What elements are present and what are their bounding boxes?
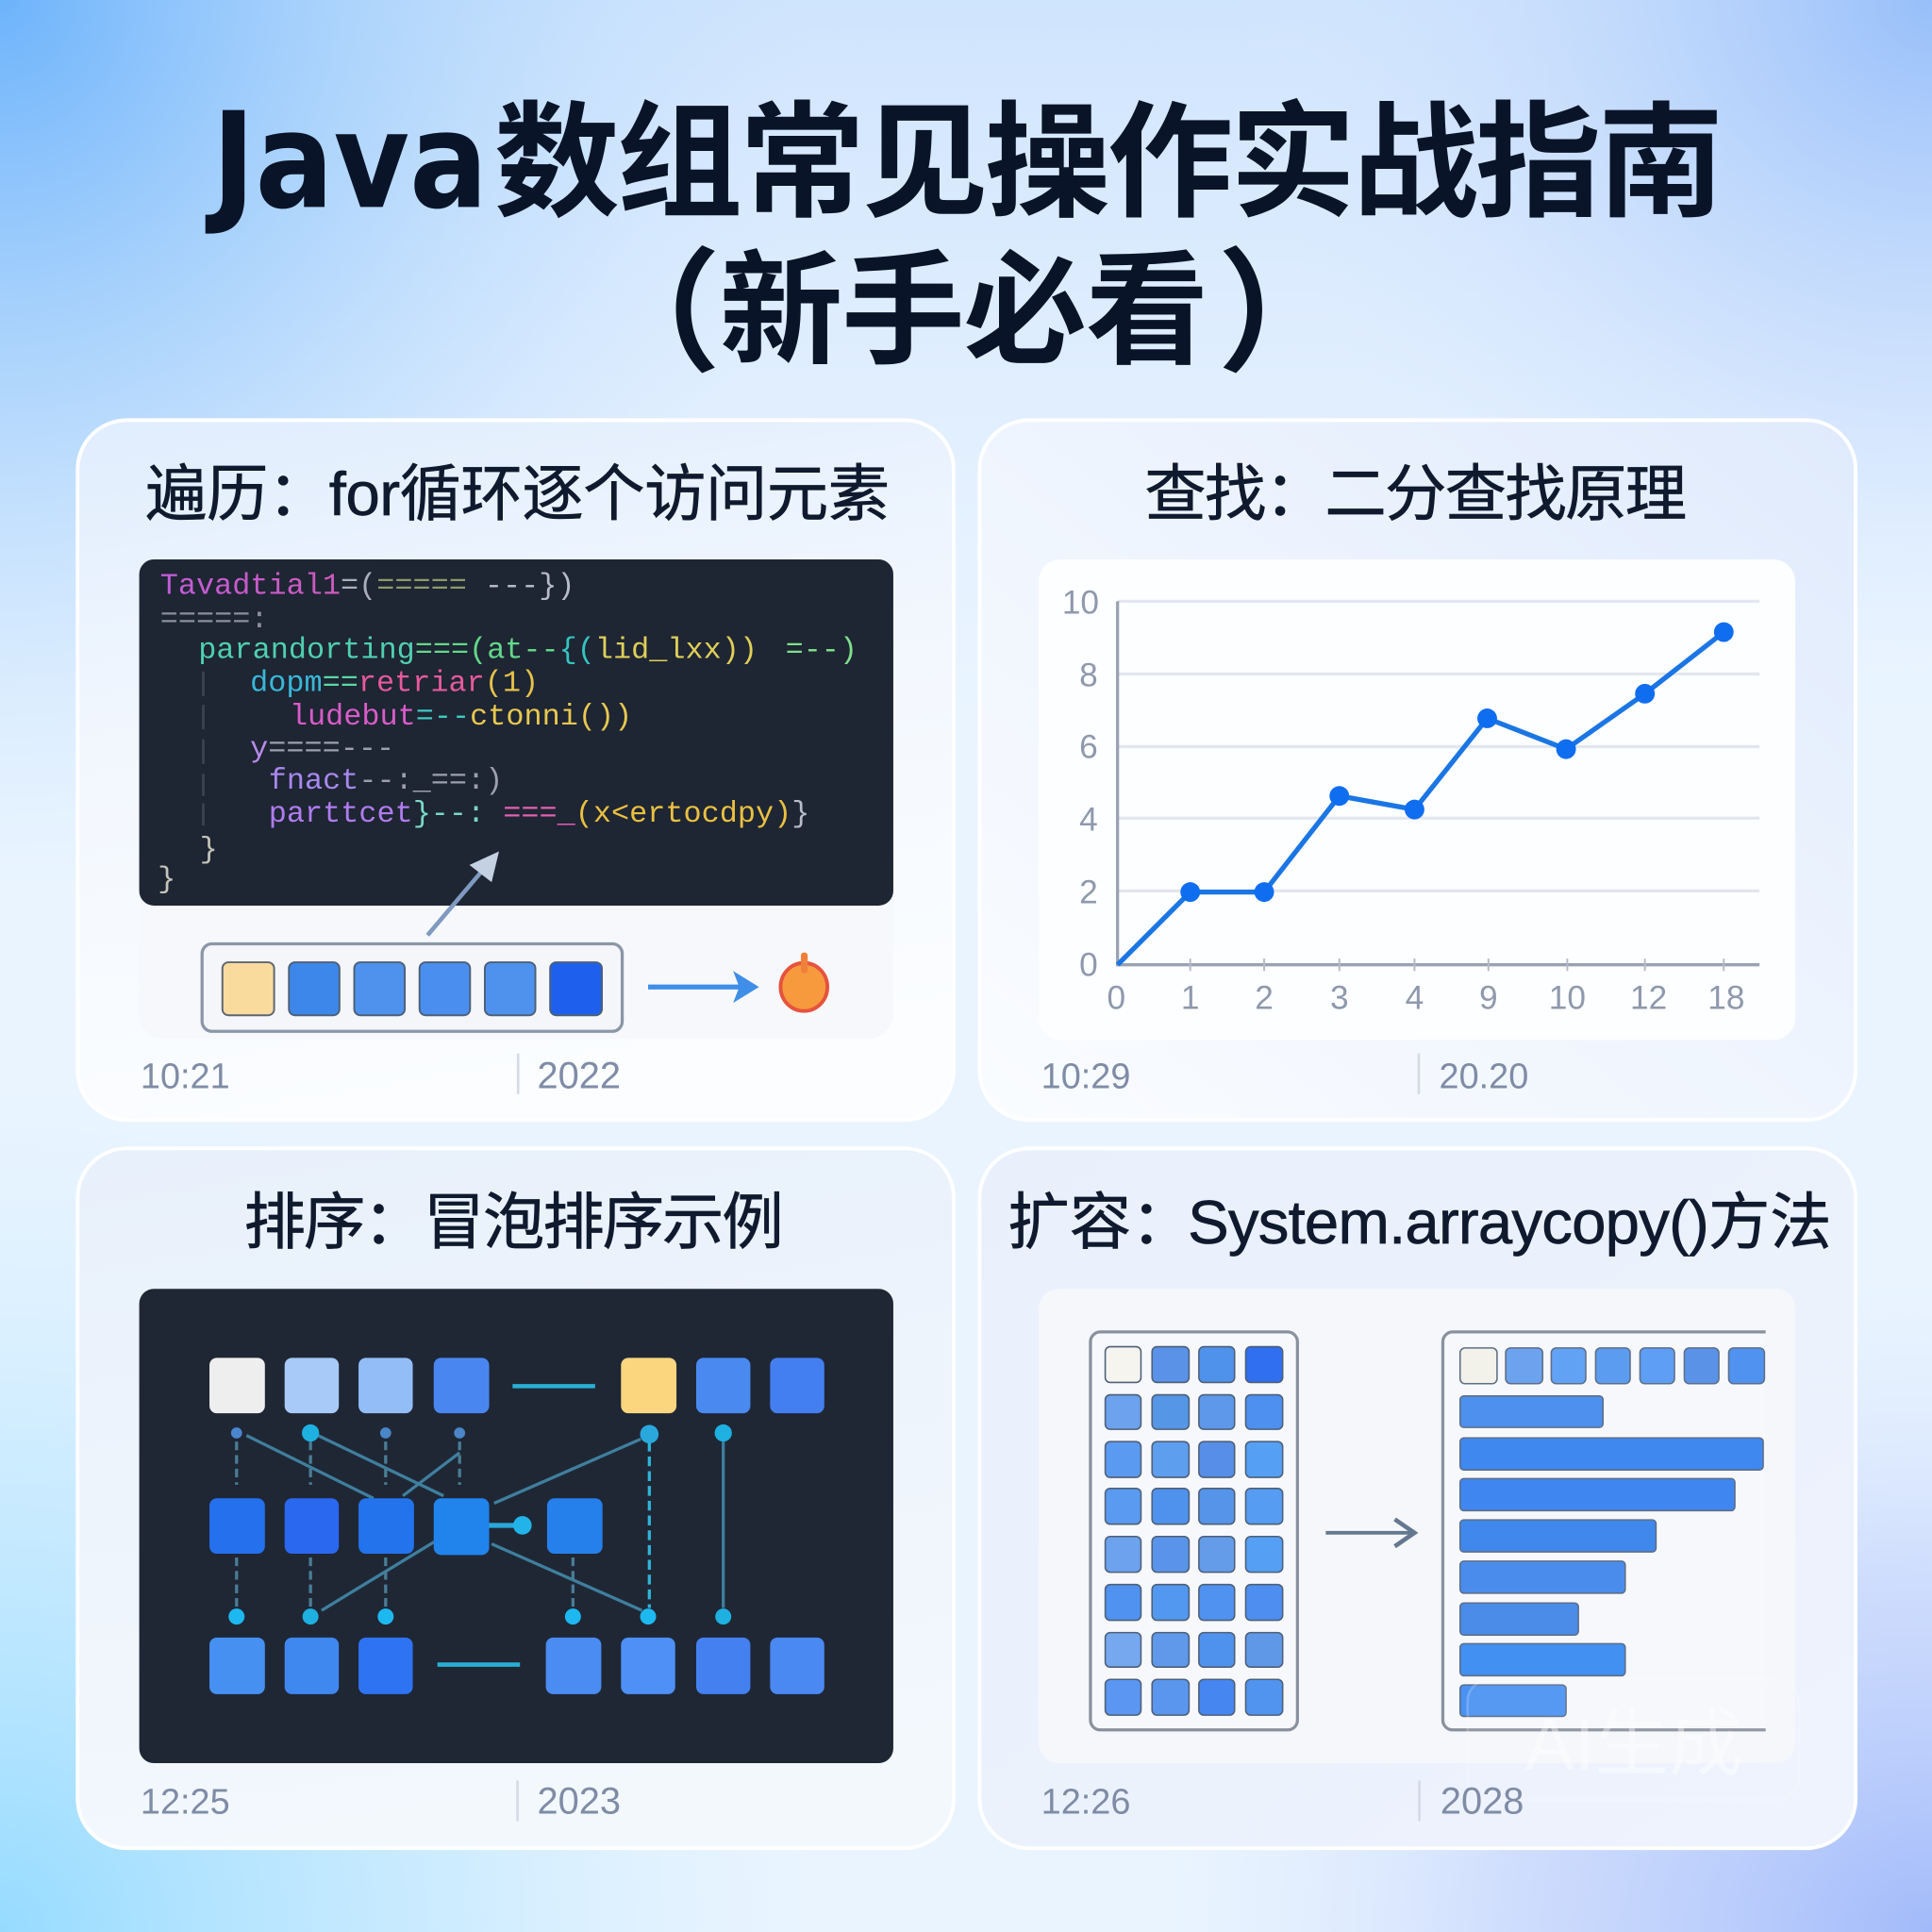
panel: search xyxy=(979,420,1856,1120)
footer: traversal xyxy=(141,1054,621,1096)
code editor block: } xyxy=(200,832,218,867)
watermark xyxy=(1468,1679,1799,1800)
code editor block: dopm==retriar(1) xyxy=(250,666,539,701)
title: （ xyxy=(588,205,721,398)
x axis labels: 3 xyxy=(1330,980,1349,1017)
footer: search: 20.20 xyxy=(1440,1057,1528,1096)
source array xyxy=(1091,1332,1297,1730)
panel: sort xyxy=(77,1148,954,1848)
footer: traversal: 2022 xyxy=(537,1055,621,1096)
y axis labels: 4 xyxy=(1079,801,1098,838)
y axis labels: 10 xyxy=(1062,584,1099,621)
squares row 3 xyxy=(209,1638,824,1694)
footer: sort: 12:25 xyxy=(141,1783,230,1823)
heading: traversal: 遍历：for循环逐个访问元素 xyxy=(145,459,890,528)
data line xyxy=(1118,632,1724,965)
squares row 2 xyxy=(209,1498,603,1555)
footer: expansion xyxy=(1041,1780,1524,1823)
y axis labels: 0 xyxy=(1079,946,1098,983)
code editor block: =====: xyxy=(160,602,269,637)
x axis labels: 18 xyxy=(1707,980,1744,1017)
code editor block: parandorting===(at--{(lid_lxx)) =--) xyxy=(198,632,858,667)
footer: sort: 2023 xyxy=(537,1781,621,1823)
watermark: AI生成 xyxy=(1525,1703,1742,1786)
x axis labels: 2 xyxy=(1255,980,1274,1017)
code editor block xyxy=(140,559,893,906)
arrow: copy xyxy=(1325,1519,1414,1546)
y axis labels xyxy=(1062,584,1099,983)
code editor block: Tavadtial1=(===== ---}) xyxy=(160,569,575,604)
destination array xyxy=(1442,1332,1766,1730)
arrow: to output xyxy=(648,971,759,1003)
x axis labels: 1 xyxy=(1181,980,1200,1017)
bubble sort diagram xyxy=(140,1289,893,1763)
array copy diagram xyxy=(1039,1289,1795,1763)
panel: expansion xyxy=(979,1148,1856,1848)
array row xyxy=(202,943,623,1031)
title: 新手必看 xyxy=(720,210,1208,390)
lower illustration area xyxy=(140,899,893,1039)
x axis labels: 4 xyxy=(1406,980,1424,1017)
icon: orange element xyxy=(780,953,827,1011)
code editor block: y====--- xyxy=(250,731,394,766)
x axis labels: 0 xyxy=(1108,980,1125,1017)
title: ） xyxy=(1217,205,1350,398)
footer: search: 10:29 xyxy=(1041,1057,1130,1096)
title: 数组常见操作实战指南 xyxy=(494,61,1724,243)
code editor block: parttcet}--: ===_(x<ertocdpy)} xyxy=(269,796,809,831)
y axis labels: 6 xyxy=(1079,728,1098,765)
footer: expansion: 2028 xyxy=(1441,1781,1524,1823)
line chart xyxy=(1039,559,1795,1040)
y axis labels: 2 xyxy=(1079,874,1098,910)
code editor block: fnact--:_==:) xyxy=(269,763,503,798)
panel: traversal xyxy=(77,420,954,1120)
x axis labels: 10 xyxy=(1549,980,1586,1017)
arrow: array to code xyxy=(427,852,499,935)
data points xyxy=(1180,623,1734,902)
code editor block: } xyxy=(158,861,175,896)
x axis labels: 12 xyxy=(1630,980,1667,1017)
code editor block: ludebut=--ctonni()) xyxy=(290,699,632,734)
node dots xyxy=(228,1424,732,1624)
heading: sort: 排序：冒泡排序示例 xyxy=(244,1188,784,1257)
footer: sort xyxy=(141,1780,621,1823)
title xyxy=(206,61,1724,398)
heading: expansion: 扩容：System.arraycopy()方法 xyxy=(1008,1188,1832,1257)
footer: traversal: 10:21 xyxy=(141,1057,230,1096)
squares row 1 xyxy=(209,1357,824,1413)
x axis labels xyxy=(1108,980,1744,1017)
y axis labels: 8 xyxy=(1079,658,1098,694)
title: Java xyxy=(206,84,488,239)
connectors xyxy=(237,1386,724,1665)
heading: search: 查找：二分查找原理 xyxy=(1144,459,1687,528)
footer: search xyxy=(1041,1054,1528,1096)
footer: expansion: 12:26 xyxy=(1041,1783,1130,1823)
x axis labels: 9 xyxy=(1479,980,1498,1017)
